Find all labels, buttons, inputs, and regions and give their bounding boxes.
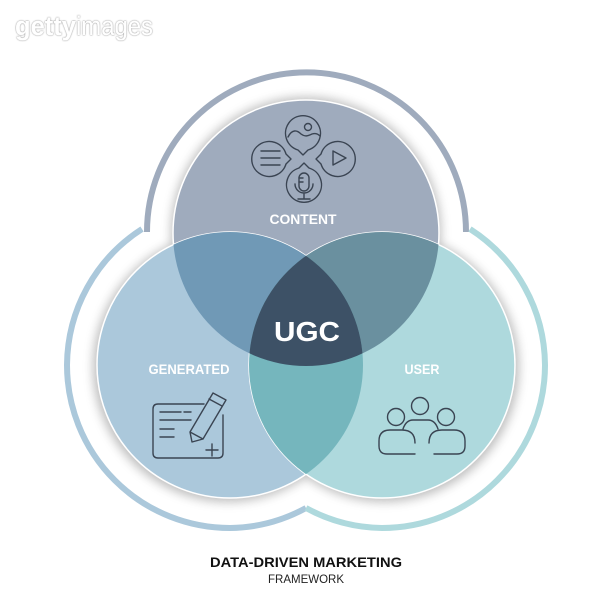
icon: microphone bubble xyxy=(286,163,322,202)
label: GENERATED: GENERATED xyxy=(148,361,230,377)
icon: image bubble xyxy=(286,116,320,155)
label: CONTENT: CONTENT xyxy=(270,211,337,227)
overlap: content and user xyxy=(306,232,438,354)
circle: user xyxy=(249,232,515,498)
outer ring: generated xyxy=(67,229,306,528)
subtitle: FRAMEWORK xyxy=(268,572,344,586)
watermark: getty xyxy=(15,11,76,41)
label: UGC: UGC xyxy=(274,316,340,347)
icon: play bubble xyxy=(316,142,355,176)
watermark: images xyxy=(76,11,153,41)
overlap: generated and user xyxy=(249,256,363,474)
title: DATA-DRIVEN MARKETING xyxy=(210,554,402,570)
outer ring: user xyxy=(306,229,545,528)
overlap: content and generated xyxy=(174,232,306,354)
circle: generated xyxy=(97,232,363,498)
icon: document and pencil xyxy=(153,393,226,458)
circle: content xyxy=(173,100,439,366)
circle shadows xyxy=(93,97,519,502)
label: USER: USER xyxy=(404,361,440,377)
icon: users group xyxy=(379,398,465,454)
outer ring: content xyxy=(147,72,466,232)
watermark xyxy=(15,11,153,41)
icon: text bubble xyxy=(252,142,291,176)
center overlap: UGC xyxy=(250,256,362,366)
icon: content bubbles xyxy=(252,116,355,202)
